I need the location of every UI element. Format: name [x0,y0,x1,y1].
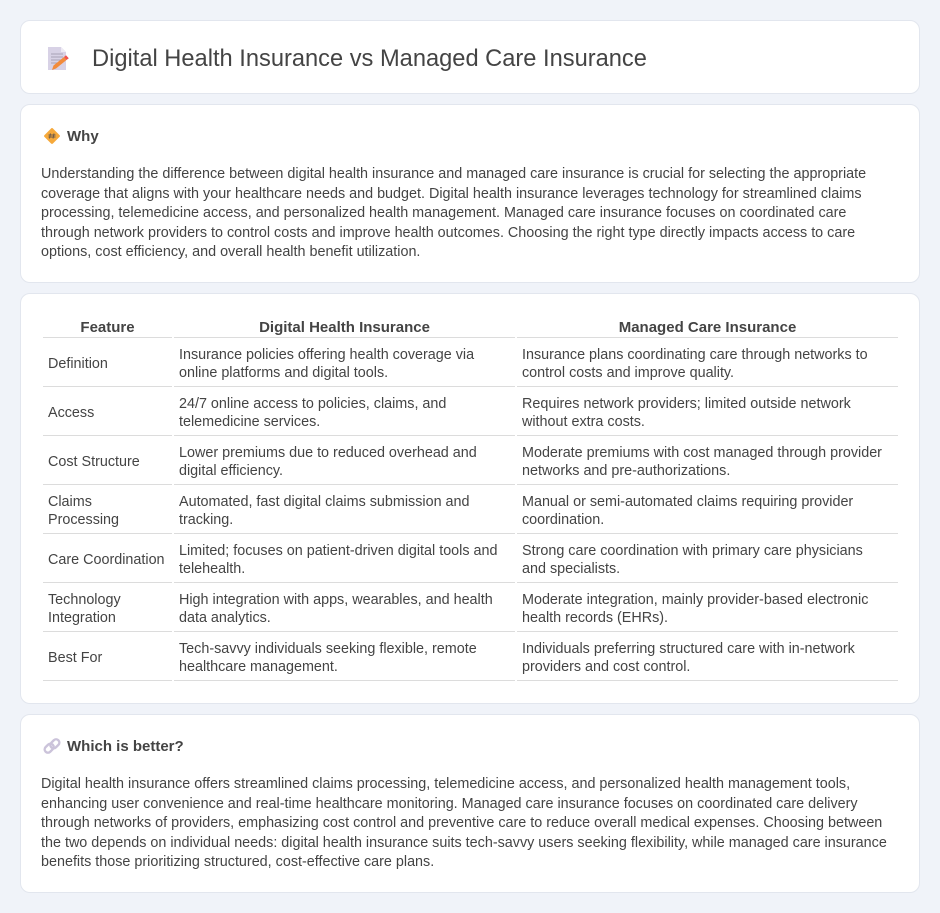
icon: warning diamond [44,128,60,144]
access: managed: Requires network providers; limited outside network [522,396,851,412]
definition: digital: Insurance policies offering health coverage via [179,347,474,363]
icon: document with pencil [48,47,69,70]
text: which is better paragraph: the two depends on individual needs: digital health insurance suits tech-savvy users seeking flexibility, while managed care insurance [41,835,887,851]
text: why paragraph: Understanding the difference between digital health insurance and managed care insurance is crucial for selecting the appropriate [41,166,866,182]
access: managed [522,396,851,430]
row: cost structure: Cost Structure [48,454,140,470]
table header: feature: Feature [80,319,135,336]
text: why paragraph: through network providers to control costs and improve health outcomes. Choosing the right type directly impacts access to care [41,225,855,241]
care: digital [179,543,498,577]
technology: managed: health records (EHRs). [522,610,668,626]
text: which is better paragraph: through networks of providers, emphasizing cost control and preventive care to reduce overall medical expenses. Choosing between [41,815,882,831]
best for: managed: Individuals preferring structured care with in-network [522,641,855,657]
row: best for: Best For [48,650,102,666]
technology: managed: Moderate integration, mainly provider-based electronic [522,592,868,608]
row: claims processing: Claims [48,494,92,510]
claims: digital: Automated, fast digital claims submission and [179,494,470,510]
title: Digital Health Insurance vs Managed Care Insurance [92,46,647,72]
text: why paragraph [41,166,866,260]
row: technology integration: Technology [48,592,121,608]
cost: digital: digital efficiency. [179,463,283,479]
definition: digital: online platforms and digital tools. [179,365,388,381]
text: which is better paragraph: Digital health insurance offers streamlined claims processing, telemedicine access, and personalized health management tools, [41,776,850,792]
best for: digital [179,641,477,675]
cost: managed: networks and pre-authorizations. [522,463,730,479]
claims: managed: coordination. [522,512,604,528]
cost: digital [179,445,477,479]
heading: why: Why [67,128,99,145]
cost: managed: Moderate premiums with cost managed through provider [522,445,882,461]
care: managed: and specialists. [522,561,620,577]
best for: managed: providers and cost control. [522,659,690,675]
panel: why [20,104,920,283]
heading: which is better: Which is better? [67,738,184,755]
definition: managed: control costs and improve quality. [522,365,734,381]
text: why paragraph: processing, telemedicine access, and personalized health management. Managed care insurance focuses on coordinated care [41,205,846,221]
care: managed [522,543,863,577]
table header: managed care insurance: Managed Care Insurance [619,319,796,336]
care: digital: Limited; focuses on patient-driven digital tools and [179,543,498,559]
definition: managed [522,347,868,381]
access: digital: telemedicine services. [179,414,320,430]
access: digital: 24/7 online access to policies, claims, and [179,396,446,412]
best for: digital: Tech-savvy individuals seeking flexible, remote [179,641,477,657]
row: technology integration: Integration [48,610,116,626]
claims: digital: tracking. [179,512,233,528]
icon: chain link [44,738,60,754]
access: digital [179,396,446,430]
claims: digital [179,494,470,528]
row: care coordination: Care Coordination [48,552,165,568]
table header: digital health insurance: Digital Health Insurance [259,319,430,336]
panel: which is better [20,714,920,893]
technology: digital [179,592,493,626]
text: why paragraph: options, cost efficiency, and overall health benefit utilization. [41,244,420,260]
claims: managed [522,494,853,528]
best for: digital: healthcare management. [179,659,338,675]
text: which is better paragraph: enhancing user convenience and real-time healthcare monitoring. Managed care insurance focuses on coordinated care delivery [41,796,858,812]
text: why paragraph: coverage that aligns with your healthcare needs and budget. Digital health insurance leverages technology for streamlined claims [41,186,862,202]
row: claims processing: Processing [48,512,119,528]
text: which is better paragraph: benefits those prioritizing structured, cost-effective care plans. [41,854,434,870]
technology: digital: data analytics. [179,610,271,626]
cost: managed [522,445,882,479]
row: technology integration [48,592,121,626]
row: access: Access [48,405,94,421]
panel: title card [20,20,920,94]
care: digital: telehealth. [179,561,245,577]
cost: digital: Lower premiums due to reduced overhead and [179,445,477,461]
definition: digital [179,347,474,381]
row: definition: Definition [48,356,108,372]
text: which is better paragraph [41,776,887,870]
claims: managed: Manual or semi-automated claims requiring provider [522,494,853,510]
technology: managed [522,592,868,626]
care: managed: Strong care coordination with primary care physicians [522,543,863,559]
technology: digital: High integration with apps, wearables, and health [179,592,493,608]
row: claims processing [48,494,119,528]
definition: managed: Insurance plans coordinating care through networks to [522,347,868,363]
access: managed: without extra costs. [522,414,645,430]
panel: comparison table [20,293,920,704]
best for: managed [522,641,855,675]
